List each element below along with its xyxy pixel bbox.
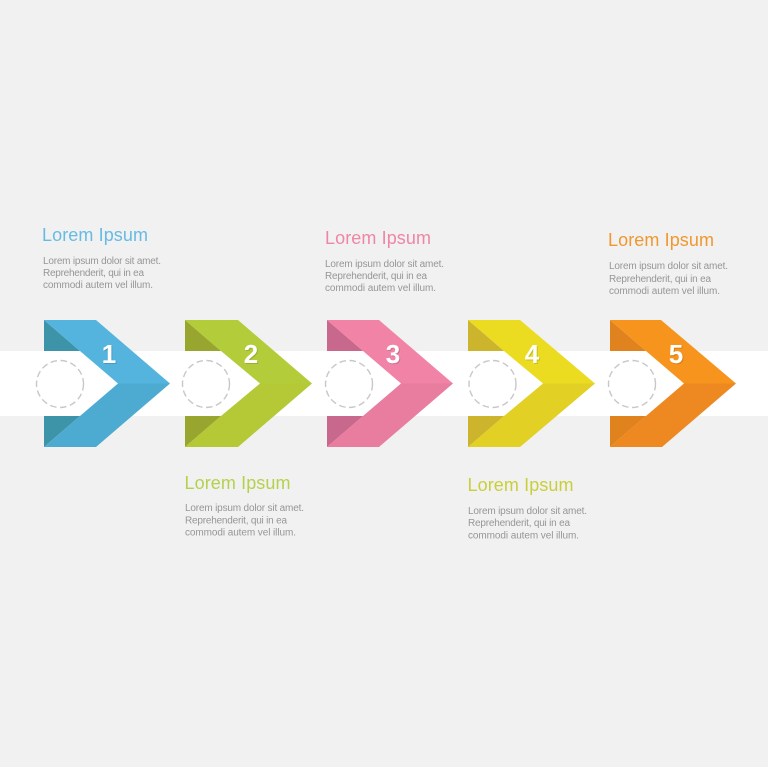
step 4 text block: Lorem Ipsum — [468, 475, 574, 495]
step 2 text block: Lorem ipsum dolor sit amet. — [185, 503, 304, 514]
step 5 text block: Reprehenderit, qui in ea — [609, 274, 711, 285]
step 5 text block: Lorem ipsum dolor sit amet. — [609, 261, 728, 272]
step 2 text block: commodi autem vel illum. — [185, 528, 296, 538]
step 3 text block: Reprehenderit, qui in ea — [325, 271, 427, 282]
step 3 text block: Lorem Ipsum — [325, 228, 431, 248]
step 2 arrow — [182, 320, 312, 447]
step 4 text block: commodi autem vel illum. — [468, 530, 579, 542]
step 1 text block: Reprehenderit, qui in ea — [43, 268, 144, 279]
step 4 text block: Reprehenderit, qui in ea — [468, 518, 570, 529]
step 1 arrow: 1 — [102, 339, 116, 369]
step 4 arrow: 4 — [525, 339, 540, 369]
step 2 text block: Lorem Ipsum — [184, 473, 290, 493]
step 2 text block — [184, 473, 304, 538]
step 4 arrow: 4 — [526, 340, 541, 370]
step 1 text block: Lorem ipsum dolor sit amet. — [43, 256, 161, 267]
step 3 text block: Lorem ipsum dolor sit amet. — [325, 259, 444, 270]
step 1 text block — [42, 225, 161, 291]
step 4 text block: Lorem ipsum dolor sit amet. — [468, 506, 587, 517]
step 4 arrow — [468, 320, 595, 447]
step 5 arrow: 5 — [669, 339, 683, 369]
step 2 arrow: 2 — [245, 340, 259, 370]
step 4 text block — [468, 475, 587, 542]
step 1 arrow — [36, 320, 170, 447]
step 5 text block — [608, 230, 728, 297]
step 1 text block: commodi autem vel illum. — [43, 280, 153, 291]
step 3 text block: commodi autem vel illum. — [325, 283, 436, 294]
step 2 text block: Reprehenderit, qui in ea — [185, 516, 287, 526]
step 1 arrow: 1 — [103, 340, 117, 370]
step 1 text block: Lorem Ipsum — [42, 225, 148, 245]
step 3 arrow: 3 — [387, 340, 401, 370]
step 5 arrow: 5 — [670, 340, 684, 370]
step 3 arrow — [326, 320, 453, 447]
step 3 arrow: 3 — [386, 339, 400, 369]
step 2 arrow: 2 — [244, 339, 258, 369]
step 3 text block — [325, 228, 444, 294]
step 5 text block: Lorem Ipsum — [608, 230, 714, 250]
step 5 text block: commodi autem vel illum. — [609, 286, 720, 297]
white timeline band — [0, 351, 768, 416]
step 5 arrow — [608, 320, 736, 447]
